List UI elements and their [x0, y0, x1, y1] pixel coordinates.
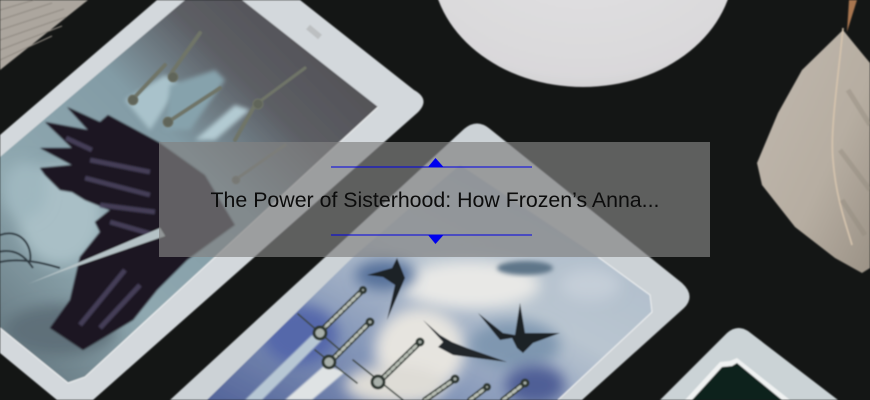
long blade	[28, 228, 165, 284]
title text: The Power of Sisterhood: How Frozen’s Anna...	[211, 188, 659, 212]
dried leaf	[757, 0, 870, 273]
tarot card: raven and swords	[0, 0, 424, 400]
swords	[298, 288, 528, 400]
wood surface corner	[0, 0, 88, 70]
tarot card: birds and swords	[170, 124, 690, 400]
bird one	[367, 258, 405, 320]
tarot card: dark lower right	[660, 328, 838, 400]
translucent title panel	[159, 142, 710, 257]
card numeral	[308, 27, 320, 37]
raven wing	[40, 107, 235, 350]
white bowl	[432, 0, 734, 87]
bird two	[423, 320, 507, 362]
bottom divider with diamond	[331, 234, 532, 244]
top divider with diamond	[331, 158, 532, 168]
bird three	[478, 303, 560, 353]
swords	[128, 33, 305, 184]
